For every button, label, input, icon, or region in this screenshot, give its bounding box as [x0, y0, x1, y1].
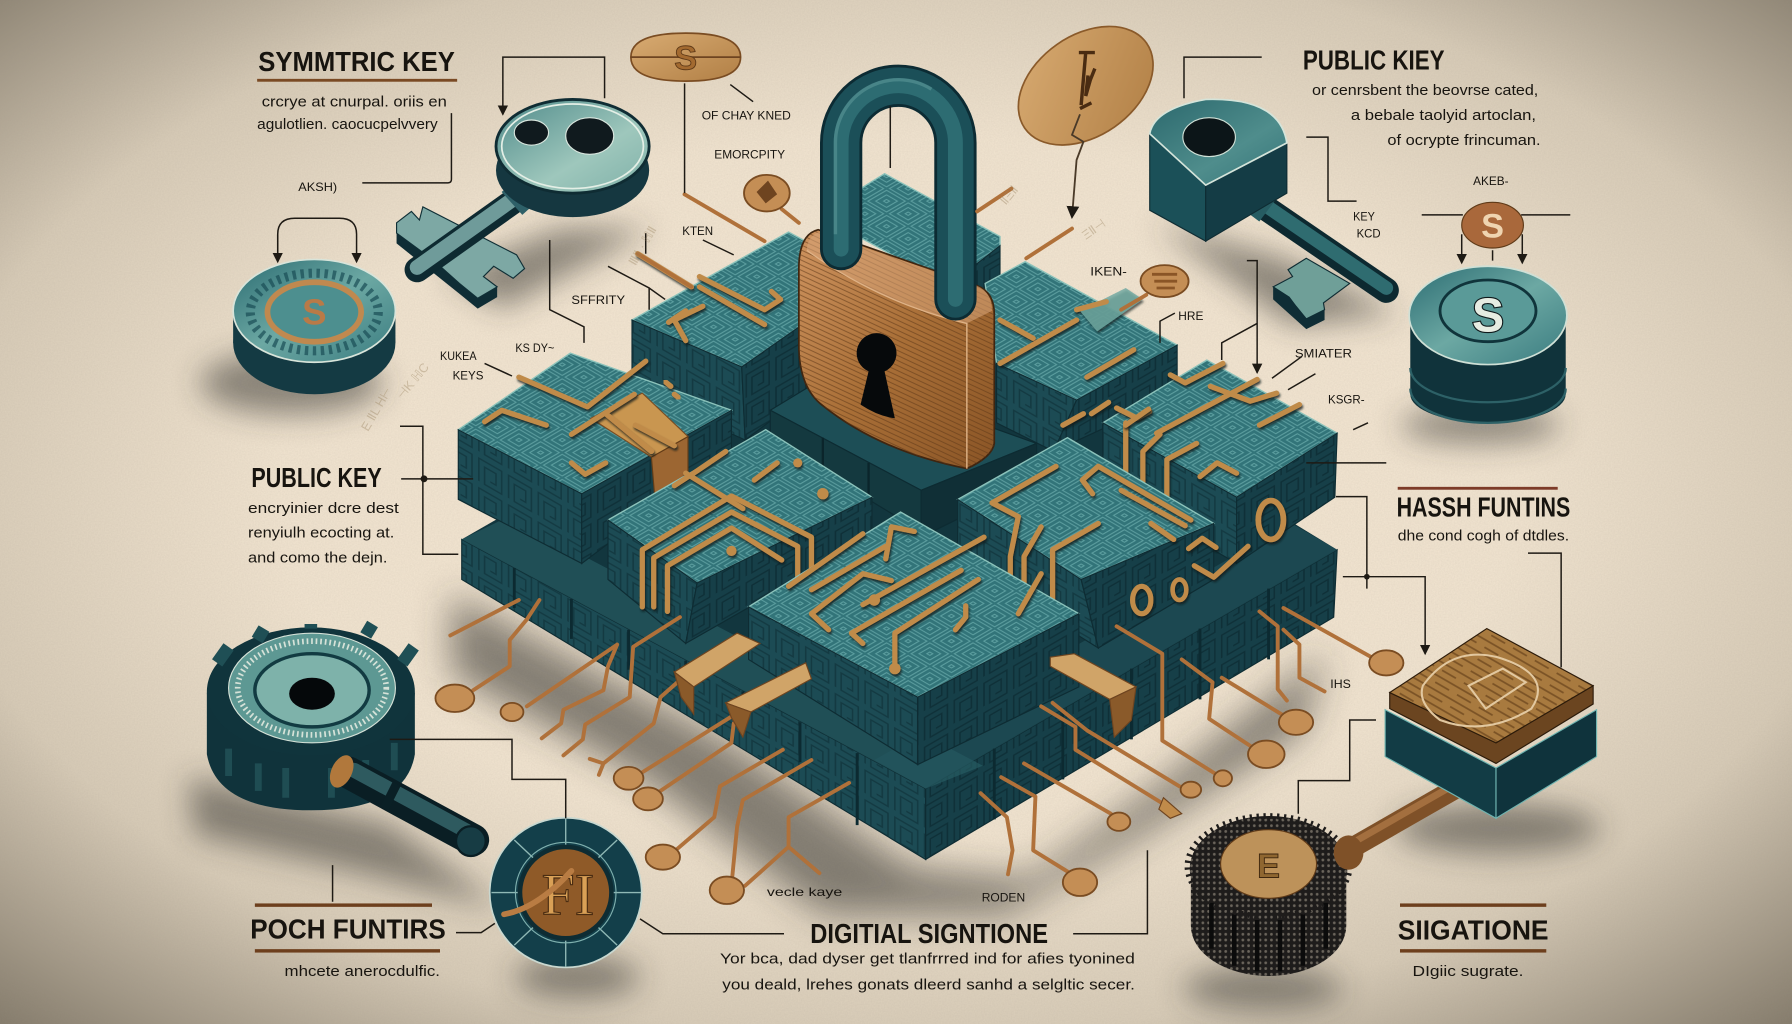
stamp handle [1350, 786, 1459, 849]
heading: signature: SIIGATIONE [1398, 914, 1549, 945]
left key [397, 99, 649, 309]
small copper coin over stack [1462, 202, 1523, 248]
pill coin [631, 33, 741, 81]
heading: digital signature: DIGITIAL SIGNTIONE [810, 918, 1048, 949]
block F [1103, 360, 1337, 563]
padlock [799, 80, 994, 469]
small callout labels: KSGR- [1328, 392, 1365, 406]
faint rotated marks: ⅢⅡ · ℍⅡ [626, 224, 659, 268]
heading: poch functions: POCH FUNTIRS [250, 913, 446, 944]
block C [608, 430, 872, 643]
small callout labels: KEYS [453, 368, 483, 382]
small callout labels: OF CHAY KNED [702, 108, 791, 122]
shackle [841, 86, 955, 299]
gear lock [207, 624, 486, 856]
left S coin [233, 259, 395, 394]
gear collar [325, 752, 358, 791]
heading: public key right [1303, 45, 1541, 149]
faint rotated marks: ⊣K ℍC [394, 360, 432, 402]
heading: public key left [248, 462, 400, 566]
round badge: FI [542, 861, 594, 927]
heading: symmetric key: SYMMTRIC KEY [258, 46, 455, 77]
left S coin: S [302, 292, 326, 333]
key head [496, 123, 649, 217]
key bit [397, 233, 497, 309]
gold strip [591, 393, 688, 457]
small callout labels: KEY [1353, 210, 1375, 224]
key bit [1273, 258, 1350, 319]
faint rotated marks: ΞⅡ⊣ [1079, 216, 1108, 242]
chip stack [458, 174, 1337, 859]
heading: public key right: or cenrsbent the beovrse cated, [1312, 83, 1538, 99]
lock body [799, 230, 994, 469]
stamp wood [1390, 686, 1593, 763]
round badge [490, 818, 642, 967]
back block I [823, 174, 1000, 331]
wooden stamp [1350, 629, 1597, 849]
small callout labels: EMORCPITY [714, 147, 785, 161]
small callout labels: SMIATER [1295, 347, 1352, 361]
heading: public key left: encryinier dcre dest [248, 501, 400, 517]
shackle lead line [889, 106, 891, 168]
heading: symmetric key: crcrye at cnurpal. oriis en [262, 94, 447, 110]
heading: signature: DIgiic sugrate. [1413, 964, 1523, 980]
small callout labels: RODEN [982, 891, 1025, 905]
right coin stack: S [1472, 289, 1504, 342]
heading: public key right: PUBLIC KIEY [1303, 45, 1445, 76]
outer circuit traces [435, 175, 1403, 904]
block E [958, 438, 1248, 648]
heading: symmetric key: agulotlien. caocucpelvvery [257, 117, 438, 133]
spiked brush [1187, 816, 1363, 976]
heading: poch functions [250, 903, 446, 980]
small callout labels: vecle kaye [767, 885, 843, 899]
small callout labels: AKEB- [1473, 174, 1509, 188]
right key [1150, 99, 1386, 329]
key shaft [417, 197, 520, 270]
faint rotated marks [358, 183, 1108, 434]
small callout labels [298, 108, 1509, 905]
small callout labels: KCD [1357, 227, 1381, 241]
small callout labels: AKSH) [298, 180, 337, 194]
heading: public key left: and como the dejn. [248, 550, 387, 566]
leader lines [278, 57, 1570, 934]
key head [1150, 134, 1206, 241]
large hanging coin [996, 2, 1175, 217]
faint rotated marks: E ⅡL H⊢ [358, 385, 395, 433]
block D [749, 512, 1079, 765]
heading: hash functions: HASSH FUNTINS [1397, 492, 1570, 523]
heading: digital signature: Yor bca, dad dyser get tlanfrrred ind for afies tyonined [720, 951, 1135, 967]
heading: public key right: of ocrypte frincuman. [1387, 133, 1541, 149]
spiked brush: E [1257, 848, 1280, 886]
small callout labels: IKEN- [1090, 264, 1127, 278]
stamp base [1385, 710, 1496, 818]
heading: symmetric key [257, 46, 457, 133]
heading: poch functions: mhcete anerocdulfic. [285, 964, 440, 980]
small callout labels: KS DY~ [515, 341, 554, 355]
heading: public key left: PUBLIC KEY [251, 462, 382, 493]
heading: public key left: renyiulh ecocting at. [248, 526, 394, 542]
heading: hash functions: dhe cond cogh of dtdles. [1398, 529, 1569, 545]
small copper coin over stack: S [1481, 208, 1504, 246]
back block G [985, 262, 1177, 451]
heading: hash functions [1397, 487, 1570, 545]
trace terminal coins [435, 175, 1403, 904]
key shaft [1249, 197, 1386, 290]
right coin stack [1409, 266, 1567, 423]
pill coin: S [674, 40, 697, 78]
back block H [632, 232, 829, 440]
keyhole [857, 333, 896, 418]
heading: digital signature: you deald, lrehes gonats dleerd sanhd a selgltic secer. [722, 978, 1135, 994]
heading: digital signature [720, 918, 1135, 994]
small callout labels: KTEN [682, 224, 713, 238]
heading: signature [1398, 903, 1549, 980]
small callout labels: IHS [1330, 677, 1351, 691]
small callout labels: SFFRITY [571, 293, 625, 307]
gear shaft [349, 773, 473, 840]
ground shadows [189, 223, 1600, 1009]
lock base plinth [770, 371, 1037, 537]
block A [458, 353, 731, 563]
small callout labels: HRE [1178, 309, 1203, 323]
traces on block H [638, 254, 781, 341]
small callout labels: KUKEA [440, 349, 477, 363]
faint rotated marks: ⅡΞⅡ [997, 183, 1021, 208]
heading: public key right: a bebale taolyid artoclan, [1351, 108, 1536, 124]
base plate [462, 286, 1337, 859]
gear body [207, 693, 415, 810]
traces on block G [1000, 288, 1149, 425]
copper tags [674, 633, 1136, 737]
